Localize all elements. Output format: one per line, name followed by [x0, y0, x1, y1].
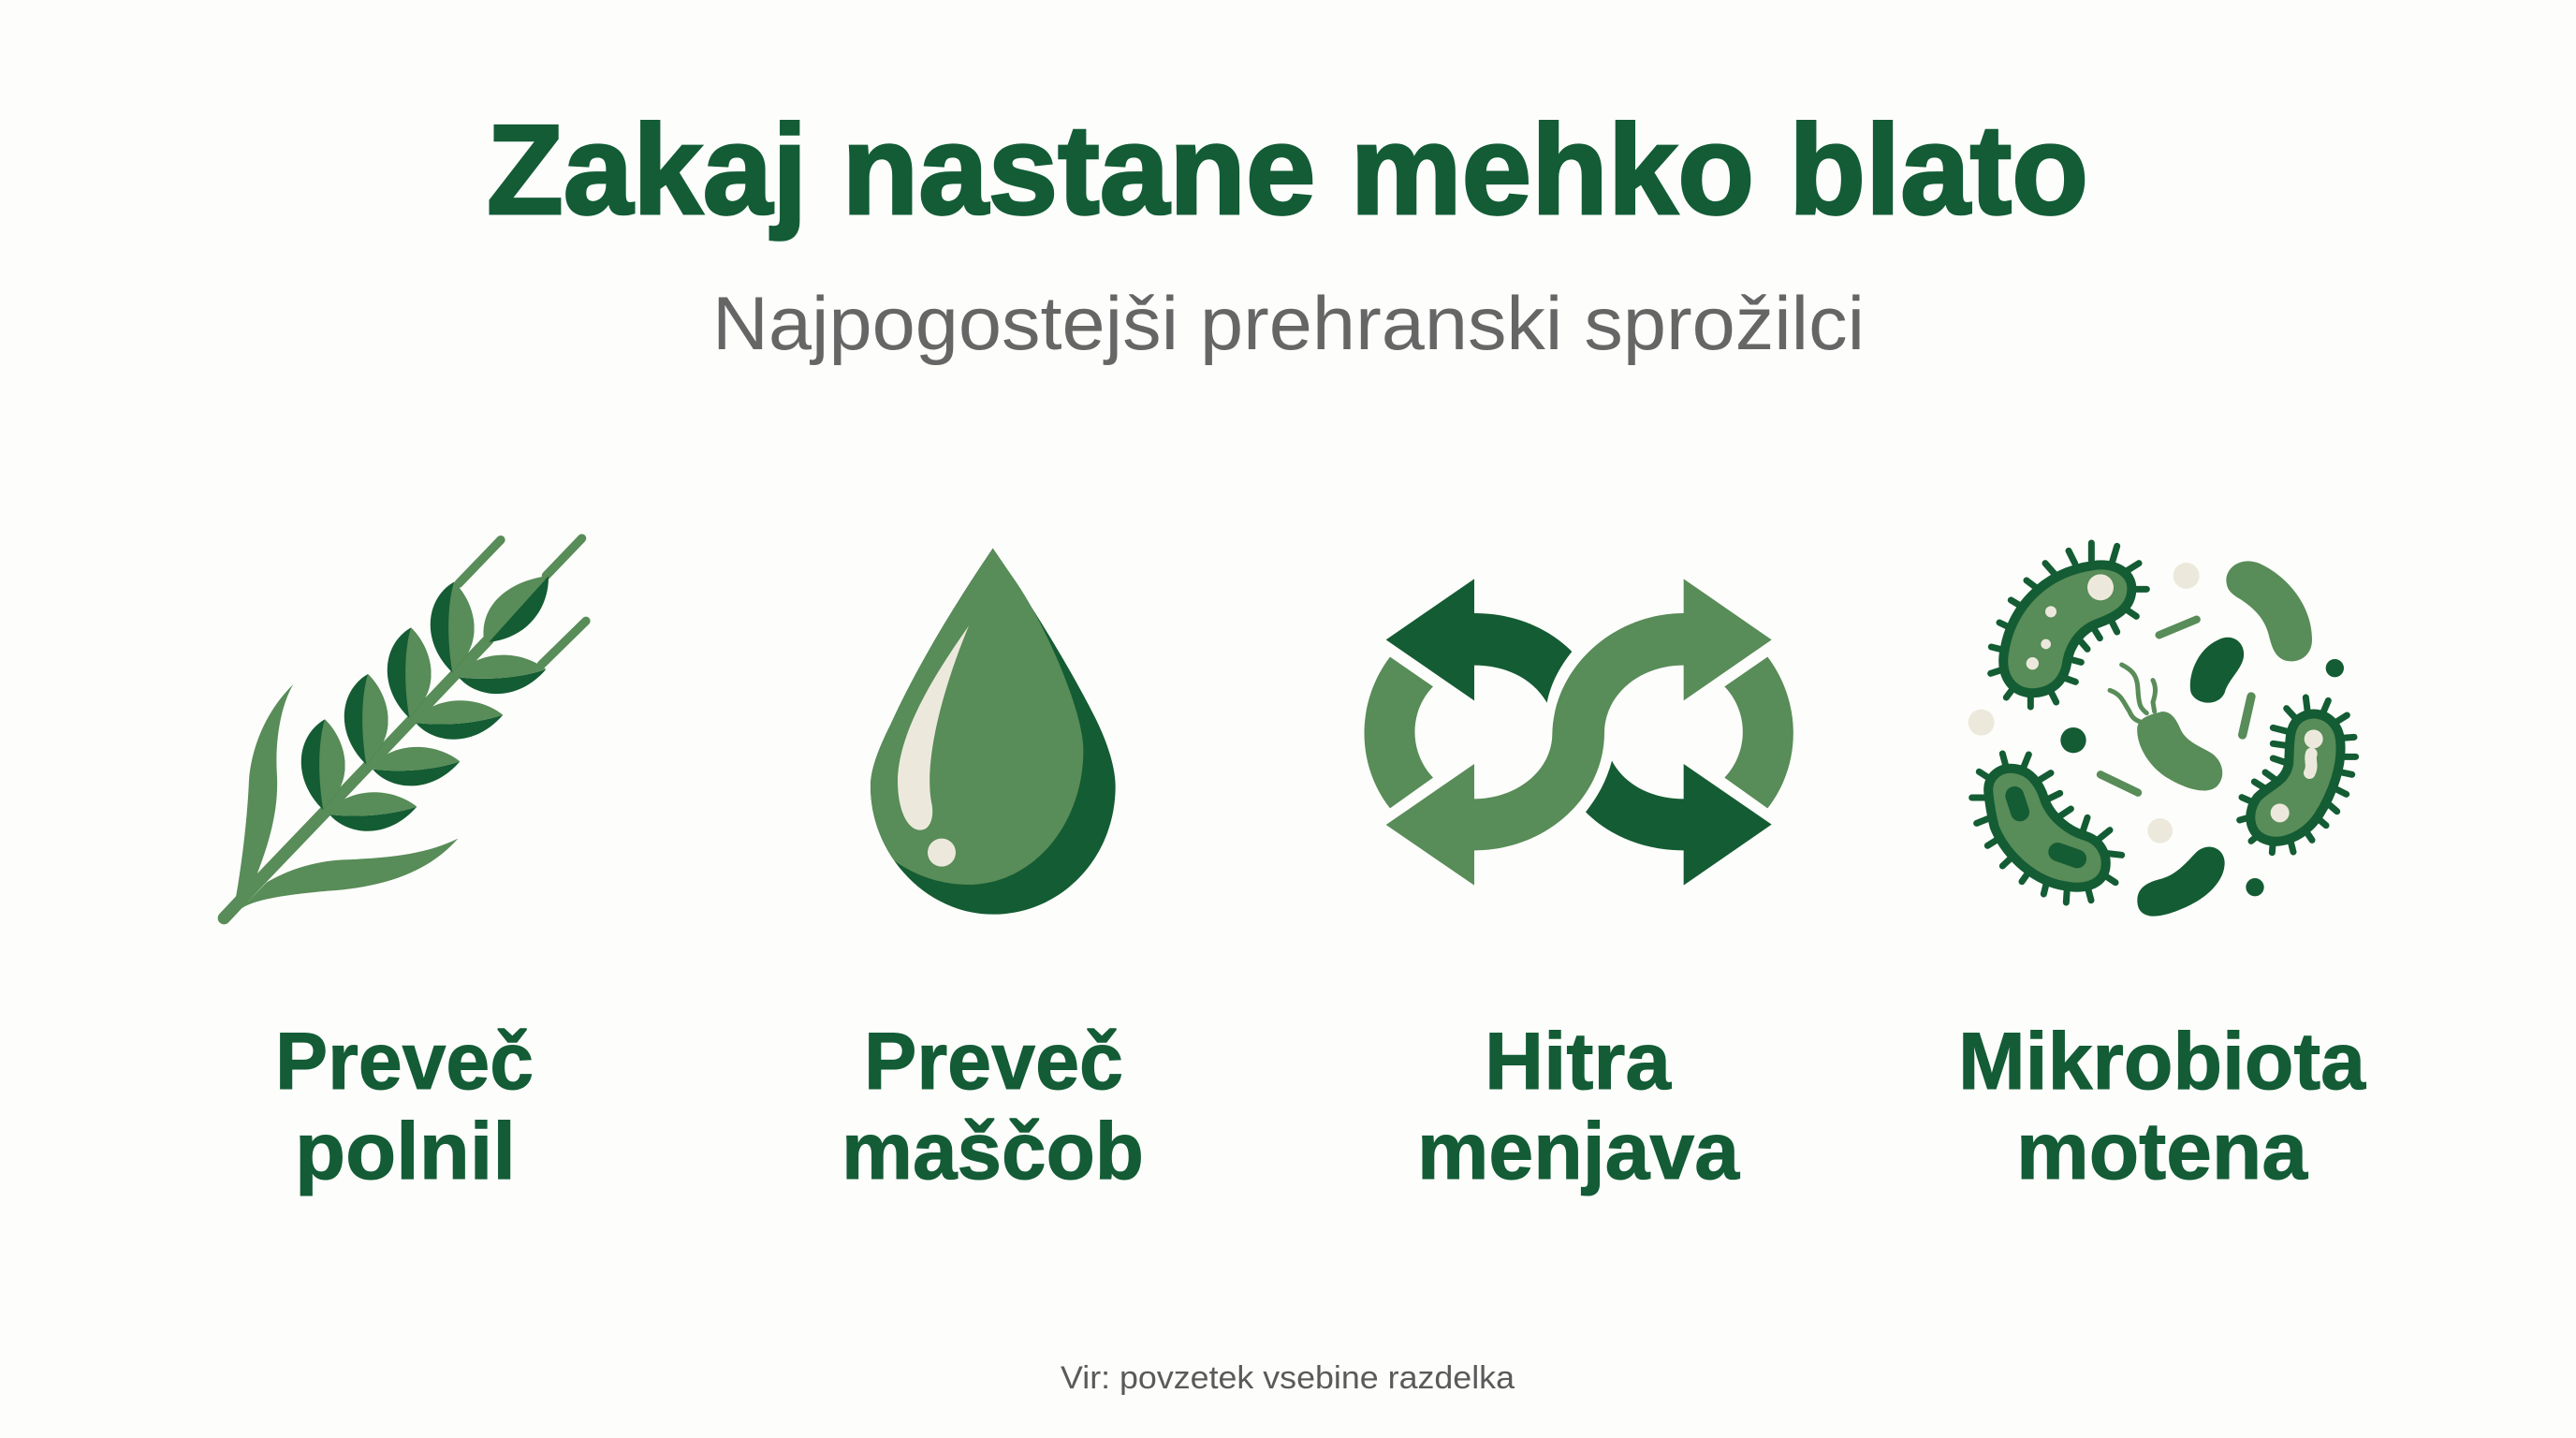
icon: gut bacteria: [1969, 543, 2356, 917]
label: Preveč maščob: [842, 1017, 1144, 1196]
label: Preveč maščob: maščob: [842, 1107, 1144, 1196]
icon: wheat ear: [224, 538, 586, 918]
bacterium: top left: [1991, 543, 2146, 707]
label: Preveč polnil: [275, 1017, 534, 1196]
label: Hitra menjava: Hitra: [1485, 1017, 1672, 1107]
label: Preveč maščob: Preveč: [864, 1017, 1123, 1107]
bacterium: right: [2240, 697, 2356, 853]
label: Preveč polnil: polnil: [295, 1107, 516, 1196]
label: Preveč polnil: Preveč: [275, 1017, 534, 1107]
loose bacilli and particles: [1969, 561, 2344, 917]
panel: Mikrobiota motena: [1958, 543, 2366, 1196]
label: Hitra menjava: menjava: [1417, 1107, 1740, 1196]
panel: Hitra menjava: [1364, 579, 1793, 1196]
panel: Preveč maščob: [842, 549, 1144, 1196]
icon: swapping arrows: [1364, 579, 1793, 886]
bacterium: bottom left: [1972, 754, 2122, 902]
label: Hitra menjava: [1417, 1017, 1740, 1196]
panel: Preveč polnil: [224, 538, 586, 1196]
bacterium: flagellated: [2110, 665, 2222, 791]
label: Mikrobiota motena: motena: [2016, 1107, 2308, 1196]
source note: Vir: povzetek vsebine razdelka: [1061, 1360, 1515, 1396]
label: Mikrobiota motena: Mikrobiota: [1958, 1017, 2366, 1107]
label: Mikrobiota motena: [1958, 1017, 2366, 1196]
title: Zakaj nastane mehko blato: [487, 98, 2088, 241]
subtitle: Najpogostejši prehranski sprožilci: [712, 282, 1865, 366]
icon: fat drop: [871, 549, 1116, 915]
